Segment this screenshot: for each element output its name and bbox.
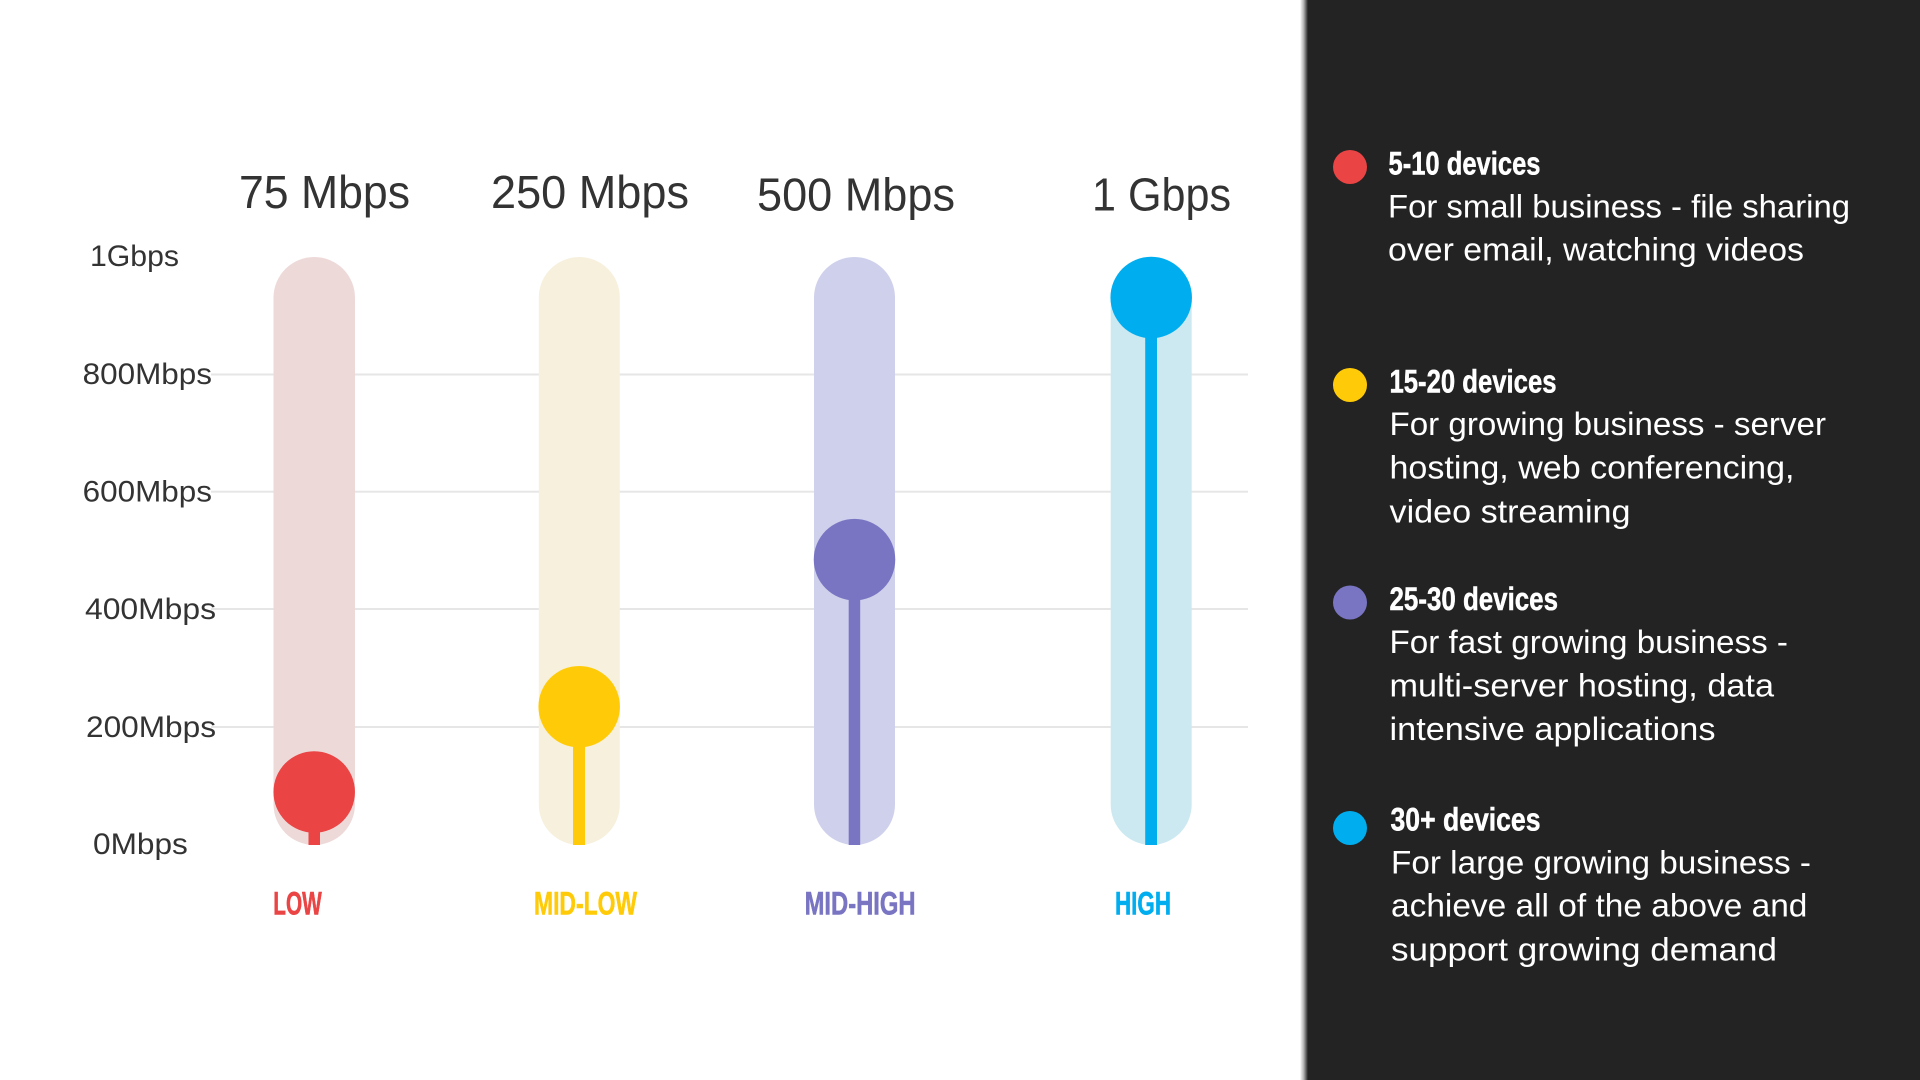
description: small business: over email, watching videos xyxy=(1388,232,1804,268)
column: high 1 Gbps xyxy=(1092,168,1231,922)
legend item: 25-30 devices xyxy=(1333,581,1788,747)
track: mid-high xyxy=(814,257,895,845)
heading: 5-10 devices: 5-10 devices xyxy=(1388,145,1540,181)
column: mid-low 250 Mbps xyxy=(491,166,689,922)
y-axis labels: 200Mbps xyxy=(86,711,216,744)
heading: 30+ devices: 30+ devices xyxy=(1390,802,1540,838)
y-axis labels: 800Mbps xyxy=(83,358,212,391)
column: low 75 Mbps xyxy=(239,166,410,922)
marker: mid-high xyxy=(814,519,895,600)
speed heading: 75 Mbps: 75 Mbps xyxy=(239,166,410,218)
description: small business xyxy=(1388,188,1850,268)
description: growing business: hosting, web conferencing, xyxy=(1390,449,1794,485)
dot: purple xyxy=(1333,586,1367,620)
description: fast growing business: intensive applications xyxy=(1390,711,1716,747)
tier label: high: HIGH xyxy=(1115,886,1171,922)
speed heading: 500 Mbps: 500 Mbps xyxy=(757,168,955,220)
description: large growing business xyxy=(1391,844,1811,968)
stem: high xyxy=(1145,298,1157,845)
description: fast growing business: multi-server hosting, data xyxy=(1390,667,1775,703)
description: growing business: For growing business - server xyxy=(1390,406,1826,442)
marker: high xyxy=(1110,257,1192,338)
description: growing business: video streaming xyxy=(1390,493,1630,529)
tier label: low: LOW xyxy=(273,886,322,922)
dot: yellow xyxy=(1333,368,1367,402)
speed heading: 1 Gbps: 1 Gbps xyxy=(1092,168,1231,220)
description: large growing business: support growing demand xyxy=(1391,932,1777,968)
stem: mid-high xyxy=(849,560,860,845)
y-axis labels: 1Gbps xyxy=(90,240,179,273)
legend item: 15-20 devices xyxy=(1333,363,1826,529)
dot: red xyxy=(1333,150,1367,184)
speed heading: 250 Mbps: 250 Mbps xyxy=(491,166,689,218)
legend item: 30+ devices xyxy=(1333,802,1811,968)
legend item: 5-10 devices xyxy=(1333,145,1850,268)
heading: 15-20 devices: 15-20 devices xyxy=(1390,363,1556,399)
track: low xyxy=(274,257,355,845)
heading: 25-30 devices: 25-30 devices xyxy=(1390,581,1558,617)
tier label: mid-high: MID-HIGH xyxy=(805,886,916,922)
description: fast growing business xyxy=(1390,624,1788,747)
dot: blue xyxy=(1333,811,1367,845)
stem: low xyxy=(308,792,320,845)
description: fast growing business: For fast growing business - xyxy=(1390,624,1788,660)
description: large growing business: For large growing business - xyxy=(1391,844,1811,880)
description: small business: For small business - file sharing xyxy=(1388,188,1850,224)
y-axis labels: 400Mbps xyxy=(85,593,216,626)
y-axis labels: 0Mbps xyxy=(93,828,188,861)
column: mid-high 500 Mbps xyxy=(757,168,955,922)
tier label: mid-low: MID-LOW xyxy=(534,886,638,922)
stem: mid-low xyxy=(573,706,585,845)
y-axis labels xyxy=(83,240,216,861)
description: large growing business: achieve all of the above and xyxy=(1391,888,1807,924)
grid lines xyxy=(211,374,1248,728)
y-axis labels: 600Mbps xyxy=(83,476,212,508)
marker: low xyxy=(273,751,355,833)
track: high xyxy=(1111,257,1192,845)
description: growing business xyxy=(1390,406,1826,529)
panel: device legend xyxy=(1300,0,1920,1080)
track: mid-low xyxy=(539,257,620,845)
marker: mid-low xyxy=(538,666,620,747)
